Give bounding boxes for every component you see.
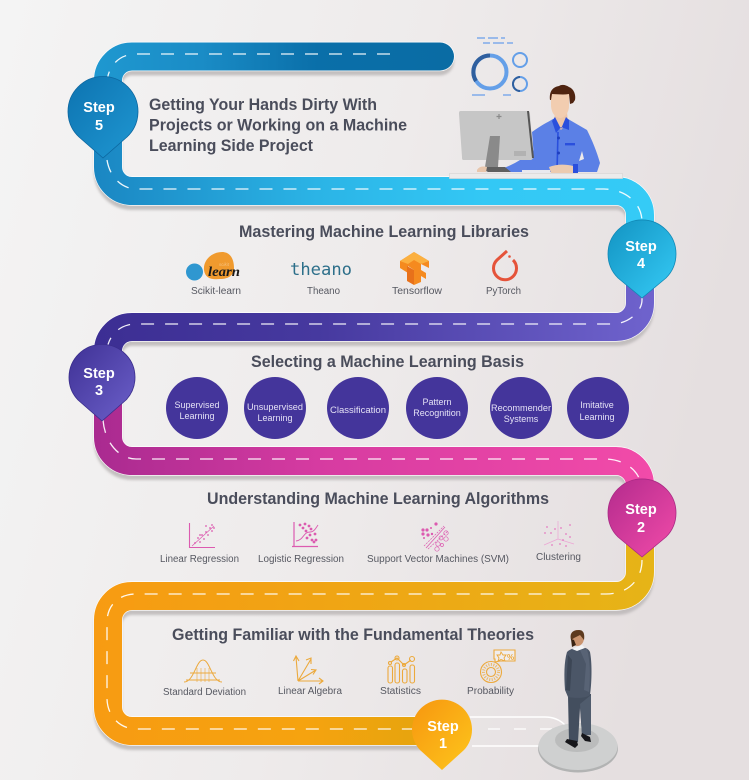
icon: pytorch	[493, 251, 516, 280]
circle: supervised learning: Learning	[179, 411, 215, 421]
circle: classification: Classification	[330, 405, 386, 415]
icon: probability	[480, 650, 515, 682]
icon: support vector machines	[421, 522, 448, 551]
circle: recommender systems: Systems	[504, 414, 539, 424]
pin: step 2	[608, 479, 676, 557]
step 5 heading: Getting Your Hands Dirty With	[149, 96, 377, 114]
icon: scikit-learn: learn	[208, 265, 240, 280]
pin: step 4	[608, 220, 676, 298]
circle: imitative learning: Imitative	[580, 400, 614, 410]
label: pytorch: PyTorch	[486, 286, 521, 297]
label: theano: Theano	[307, 286, 340, 297]
icon: statistics	[388, 656, 414, 683]
section: machine learning algorithms	[160, 490, 581, 565]
heading: basis: Selecting a Machine Learning Basis	[251, 353, 524, 371]
circle: unsupervised learning: Learning	[257, 413, 293, 423]
icon: linear regression	[190, 523, 215, 548]
circle: pattern recognition: Pattern	[422, 397, 452, 407]
label: standard deviation: Standard Deviation	[163, 687, 246, 698]
section: machine learning basis	[166, 353, 629, 439]
label: linear regression: Linear Regression	[160, 554, 239, 565]
label: scikit-learn: Scikit-learn	[191, 286, 241, 297]
icon: scikit-learn	[186, 252, 240, 280]
pin: step 5	[68, 77, 138, 158]
icon: logistic regression	[292, 522, 318, 547]
icon: tensorflow	[400, 252, 429, 285]
illustration: man at computer	[450, 85, 622, 178]
circle: pattern recognition	[406, 377, 468, 439]
pin: step 1: Step	[427, 719, 459, 735]
circle: imitative learning	[567, 377, 629, 439]
circle: recommender systems	[490, 377, 552, 439]
circle: supervised learning	[166, 377, 228, 439]
circle: pattern recognition: Recognition	[413, 408, 461, 418]
circle: supervised learning: Supervised	[174, 400, 220, 410]
section: fundamental theories	[163, 626, 534, 698]
winding road	[103, 54, 642, 736]
icon: probability: %	[507, 653, 514, 662]
heading: libraries: Mastering Machine Learning Libraries	[239, 223, 529, 241]
pin: step 2: Step	[625, 502, 657, 518]
icon: linear algebra	[294, 656, 323, 684]
pin: step 4: 4	[637, 256, 645, 272]
step 5 heading	[149, 96, 407, 155]
label: logistic regression: Logistic Regression	[258, 554, 344, 565]
icon: clustering	[544, 521, 574, 547]
pin: step 1	[412, 700, 472, 770]
icon: scikit-learn: scikit	[219, 262, 230, 267]
circle: classification	[327, 377, 389, 439]
end road outline to the standing man	[470, 717, 565, 746]
label: tensorflow: Tensorflow	[392, 286, 443, 297]
icon: standard deviation	[184, 660, 222, 682]
section: machine learning libraries	[186, 223, 529, 297]
illustration: standing man on platform	[538, 630, 618, 772]
pin: step 3	[69, 344, 135, 421]
circle: unsupervised learning	[244, 377, 306, 439]
step 5 heading: Projects or Working on a Machine	[149, 116, 407, 134]
label: statistics: Statistics	[380, 686, 421, 697]
label: linear algebra: Linear Algebra	[278, 686, 342, 697]
icon: data charts	[472, 38, 527, 95]
circle: recommender systems: Recommender	[491, 403, 551, 413]
pin: step 3: Step	[83, 366, 115, 382]
pin: step 5: 5	[95, 118, 103, 134]
heading: algorithms: Understanding Machine Learning Algorithms	[207, 490, 549, 508]
circle: imitative learning: Learning	[579, 412, 615, 422]
pin: step 4: Step	[625, 239, 657, 255]
label: clustering: Clustering	[536, 552, 581, 563]
label: probability: Probability	[467, 686, 514, 697]
pin: step 3: 3	[95, 383, 103, 399]
heading: theories: Getting Familiar with the Fundamental Theories	[172, 626, 534, 644]
pin: step 1: 1	[439, 736, 447, 752]
step 5 heading: Learning Side Project	[149, 137, 313, 155]
label: support vector machines: Support Vector Machines (SVM)	[367, 554, 509, 565]
pin: step 2: 2	[637, 520, 645, 536]
circle: unsupervised learning: Unsupervised	[247, 402, 303, 412]
logo: theano: theano	[290, 260, 352, 280]
pin: step 5: Step	[83, 100, 115, 116]
